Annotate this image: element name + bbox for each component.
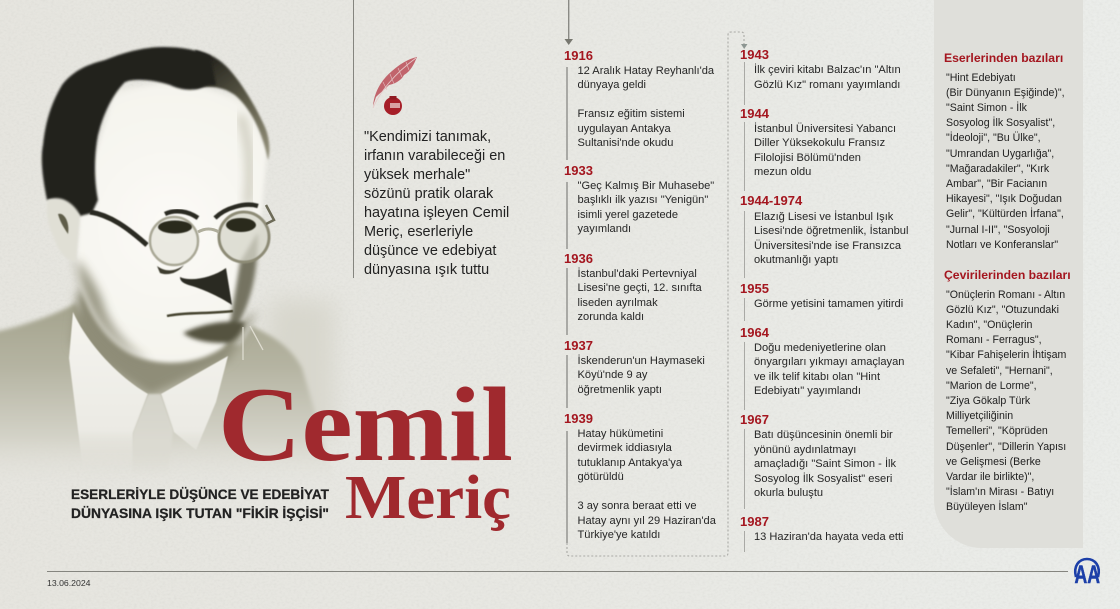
text block: works list: "Hint Edebiyatı [946, 72, 1016, 84]
entry 1987: 1987 [740, 514, 769, 529]
entry 1939: 1939 [564, 411, 593, 426]
entry 1944: İstanbul Üniversitesi Yabancı [754, 123, 896, 135]
entry 1916: Fransız eğitim sistemi [578, 108, 685, 120]
entry 1955 [740, 281, 903, 321]
text block: quote: yüksek merhale" [364, 167, 470, 183]
text block: quote: Meriç, eserleriyle [364, 224, 473, 240]
entry 1967 [740, 412, 896, 509]
text block: translations list: Düşenler", "Dillerin Yapısı [946, 441, 1066, 453]
text block: translations list: Temelleri", "Köprüden [946, 425, 1048, 437]
entry 1943: İlk çeviri kitabı Balzac'ın "Altın [754, 64, 901, 76]
text block: quote: hayatına işleyen Cemil [364, 205, 509, 221]
entry 1967: 1967 [740, 412, 769, 427]
entry 1944: Filolojisi Bölümü'nden [754, 152, 861, 164]
subtitle: ESERLERİYLE DÜŞÜNCE VE EDEBİYAT [71, 486, 329, 502]
entry 1964: Edebiyatı" yayımlandı [754, 385, 861, 397]
text block: translations list: "Onüçlerin Romanı - Altın [946, 288, 1065, 300]
entry 1916: uygulayan Antakya [578, 123, 671, 135]
text block: quote: irfanın varabileceği en [364, 148, 505, 164]
text block: works list: "Saint Simon - İlk [946, 102, 1027, 114]
hair [42, 47, 269, 216]
entry 1916 [564, 48, 714, 160]
entry 1933: başlıklı ilk yazısı "Yenigün" [578, 194, 708, 206]
entry 1964: Doğu medeniyetlerine olan [754, 342, 886, 354]
suit [0, 303, 335, 500]
text block: works list: (Bir Dünyanın Eşiğinde)", [946, 87, 1065, 99]
text block: works list: "İdeoloji", "Bu Ülke", [946, 132, 1041, 144]
entry 1937: İskenderun'un Haymaseki [578, 355, 705, 367]
entry 1943: Gözlü Kız" romanı yayımlandı [754, 79, 900, 91]
background wash behind shoulder [255, 297, 335, 440]
entry 1916: dünyaya geldi [578, 79, 646, 91]
entry 1944-1974: okutmanlığı yaptı [754, 254, 838, 266]
text block: works list: Notları ve Konferanslar" [946, 239, 1058, 251]
text block: works list [946, 72, 1065, 251]
text block: translations list: Romanı - Ferragus", [946, 334, 1042, 346]
entry 1944-1974 [740, 193, 908, 278]
text block: translations list: Kadın", "Onüçlerin [946, 319, 1032, 331]
heading: works: Eserlerinden bazıları [944, 51, 1063, 65]
text block: translations list [946, 288, 1066, 513]
subtitle: DÜNYASINA IŞIK TUTAN "FİKİR İŞÇİSİ" [71, 505, 329, 521]
entry 1967: okurla buluştu [754, 487, 823, 499]
jaw shading [76, 115, 258, 362]
entry 1939 [564, 411, 716, 543]
jacket lapel lines [243, 326, 263, 360]
arrow: dotted connector between timeline columns [566, 32, 748, 556]
text block: translations list: "İslam'ın Mirası - Batıyı [946, 486, 1054, 498]
mouth [167, 311, 245, 343]
entry 1936: İstanbul'daki Pertevniyal [578, 268, 697, 280]
entry 1967: Batı düşüncesinin önemli bir [754, 429, 893, 441]
entry 1936: liseden ayrılmak [578, 297, 658, 309]
entry 1939: 3 ay sonra beraat etti ve [578, 500, 697, 512]
text block: quote: dünyasına ışık tuttu [364, 262, 489, 278]
entry 1964 [740, 325, 904, 410]
text block: translations list: ve Sefaleti", "Hernani", [946, 365, 1053, 377]
text block: quote: sözünü pratik olarak [364, 186, 493, 202]
entry 1944-1974: Elazığ Lisesi ve İstanbul Işık [754, 211, 893, 223]
entry 1939: Hatay hükümetini [578, 428, 663, 440]
text block: works list: "Mağaradakiler", "Kırk [946, 163, 1049, 175]
entry 1987: 13 Haziran'da hayata veda etti [754, 531, 904, 543]
entry 1916: 1916 [564, 48, 593, 63]
vertical rule beside quote [353, 0, 354, 278]
arrow: timeline start [564, 0, 573, 45]
text block: translations list: Milliyetçiliğinin [946, 410, 1013, 422]
entry 1944: 1944 [740, 106, 769, 121]
entry 1937 [564, 338, 705, 408]
entry 1937: Köyü'nde 9 ay [578, 369, 647, 381]
entry 1944-1974: Üniversitesi'nde ise Fransızca [754, 240, 901, 252]
text block: works list: Hikayesi", "Işık Doğudan [946, 193, 1062, 205]
entry 1933: isimli yerel gazetede [578, 209, 678, 221]
entry 1936: Lisesi'ne geçti, 12. sınıfta [578, 282, 702, 294]
entry 1943 [740, 47, 901, 105]
panel: works sidebar [934, 0, 1083, 548]
text block: translations list: "Ziya Gökalp Türk [946, 395, 1030, 407]
entry 1933 [564, 163, 714, 249]
title: Meriç: Meriç [345, 464, 511, 532]
entry 1916: 12 Aralık Hatay Reyhanlı'da [578, 65, 714, 77]
text block: translations list: Vardar ile birlikte)", [946, 471, 1034, 483]
entry 1964: 1964 [740, 325, 769, 340]
text block: translations list: Gözlü Kız", "Otuzundaki [946, 304, 1059, 316]
face [76, 80, 267, 363]
entry 1939: devirmek iddiasıyla [578, 442, 672, 454]
text block: translations list: ve Gelişmesi (Berke [946, 456, 1041, 468]
text block: quote: düşünce ve edebiyat [364, 243, 496, 259]
text block: works list: Sosyolog İlk Sosyalist", [946, 117, 1055, 129]
entry 1937: 1937 [564, 338, 593, 353]
entry 1937: öğretmenlik yaptı [578, 384, 662, 396]
heading: translations: Çevirilerinden bazıları [944, 268, 1071, 282]
entry 1964: ve ilk telif kitabı olan "Hint [754, 371, 880, 383]
entry 1939: götürüldü [578, 471, 624, 483]
entry 1939: Hatay aynı yıl 29 Haziran'da [578, 515, 716, 527]
entry 1955: 1955 [740, 281, 769, 296]
date: 13.06.2024 [47, 578, 90, 588]
shirt collar [69, 312, 228, 478]
text block: works list: Ambar", "Bir Facianın [946, 178, 1047, 190]
text block: translations list: Büyüleyen İslam" [946, 501, 1028, 513]
footer rule [47, 570, 1068, 572]
entry 1933: yayımlandı [578, 223, 631, 235]
text block: works list: Gelir", "Kültürden İrfana", [946, 208, 1064, 220]
entry 1944 [740, 106, 896, 191]
text block: quote [364, 128, 509, 278]
entry 1943: 1943 [740, 47, 769, 62]
entry 1933: "Geç Kalmış Bir Muhasebe" [578, 180, 714, 192]
entry 1987 [740, 514, 904, 552]
panel: portrait photograph [0, 45, 338, 466]
entry 1944-1974: 1944-1974 [740, 193, 802, 208]
entry 1964: önyargıları yıkmayı amaçlayan [754, 356, 904, 368]
subtitle [71, 486, 329, 521]
nose shadow [180, 268, 232, 305]
text block: works list: "Jurnal I-II", "Sosyoloji [946, 224, 1050, 236]
entry 1939: Türkiye'ye katıldı [578, 529, 660, 541]
entry 1967: amaçladığı "Saint Simon - İlk [754, 458, 896, 470]
glasses and eyes [90, 205, 274, 274]
entry 1916: Sultanisi'nde okudu [578, 137, 673, 149]
entry 1939: tutuklanıp Antakya'ya [578, 457, 682, 469]
text block: translations list: "Marion de Lorme", [946, 380, 1037, 392]
timeline column 1 [564, 48, 716, 543]
timeline column 2 [740, 47, 908, 552]
entry 1944: Diller Yüksekokulu Fransız [754, 137, 885, 149]
icon: quill and inkwell [372, 57, 417, 115]
entry 1944-1974: Lisesi'nde öğretmenlik, İstanbul [754, 225, 908, 237]
title: Cemil Meriç and subtitle [71, 370, 513, 532]
entry 1936 [564, 251, 702, 335]
text block: works list: "Umrandan Uygarlığa", [946, 148, 1054, 160]
ear [47, 198, 80, 262]
entry 1955: Görme yetisini tamamen yitirdi [754, 298, 903, 310]
entry 1967: Sosyolog İlk Sosyalist" eseri [754, 473, 892, 485]
neck shadow [72, 290, 258, 396]
text block: translations list: "Kibar Fahişelerin İhtişam [946, 349, 1066, 361]
entry 1936: 1936 [564, 251, 593, 266]
entry 1936: zorunda kaldı [578, 311, 644, 323]
entry 1967: yönünü aydınlatmayı [754, 444, 856, 456]
text block: quote: "Kendimizi tanımak, [364, 128, 491, 144]
entry 1944: mezun oldu [754, 166, 811, 178]
entry 1933: 1933 [564, 163, 593, 178]
